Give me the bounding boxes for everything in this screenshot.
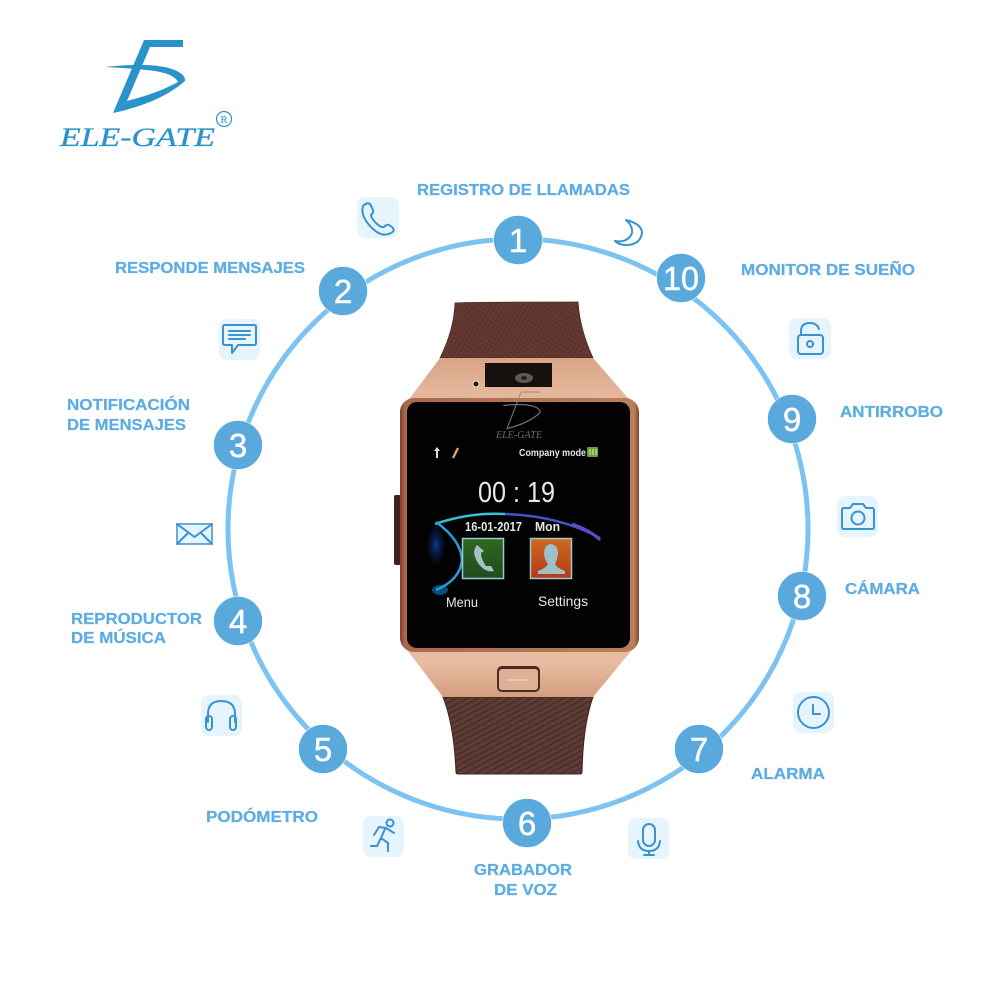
label: alarma: ALARMA xyxy=(751,766,825,783)
upper strap xyxy=(440,302,593,358)
node 6: 6 xyxy=(518,805,536,842)
node 7: 7 xyxy=(690,731,708,768)
icon: message bubble xyxy=(219,319,260,360)
side button xyxy=(394,495,401,565)
node 10: 10 xyxy=(663,260,699,297)
phone app icon xyxy=(462,538,504,578)
icon: camera xyxy=(837,496,878,537)
icon: microphone xyxy=(628,818,669,859)
node 1 xyxy=(494,216,542,264)
smartwatch xyxy=(394,302,639,774)
node 8: 8 xyxy=(793,578,811,615)
node 7 xyxy=(674,724,724,774)
logo: ELE-GATE: R xyxy=(220,114,228,126)
node 1: 1 xyxy=(509,222,527,259)
screen logo: ELE-GATE xyxy=(495,430,542,441)
label: cámara: CÁMARA xyxy=(845,579,920,598)
icon: runner xyxy=(363,816,404,857)
contacts app icon xyxy=(530,538,572,578)
node 4: 4 xyxy=(229,603,247,640)
screen menu label: Menu xyxy=(446,594,478,610)
status bar xyxy=(434,447,598,459)
status bar: Company mode xyxy=(519,448,586,459)
date: 16-01-2017 xyxy=(465,520,522,534)
lower strap xyxy=(443,697,593,774)
node 2 xyxy=(318,266,368,316)
logo: ELE-GATE: ELE-GATE xyxy=(59,123,215,152)
node 5: 5 xyxy=(314,731,332,768)
icon: envelope xyxy=(177,524,212,544)
icon: moon xyxy=(615,220,642,245)
node 4 xyxy=(214,596,262,646)
wallpaper arcs xyxy=(426,514,600,595)
icon: clock xyxy=(793,692,834,733)
icon: phone xyxy=(357,197,399,238)
label: registro de llamadas: REGISTRO DE LLAMADAS xyxy=(417,182,630,199)
node 2: 2 xyxy=(334,273,352,310)
node 9 xyxy=(768,394,816,444)
home button xyxy=(497,666,540,692)
node 8 xyxy=(778,572,826,620)
screen settings label: Settings xyxy=(538,593,588,609)
label: reproductor de música: DE MÚSICA xyxy=(71,628,166,647)
clock time: 00 : 19 xyxy=(478,477,555,509)
label: responde mensajes: RESPONDE MENSAJES xyxy=(115,260,305,277)
feature ring xyxy=(228,239,808,819)
screen bezel xyxy=(400,398,639,652)
screen xyxy=(407,402,630,648)
node 6 xyxy=(502,798,552,848)
watch body xyxy=(400,358,639,697)
label: notificación de mensajes: NOTIFICACIÓN xyxy=(67,395,190,414)
logo: ELE-GATE xyxy=(59,40,232,152)
icon: open padlock xyxy=(789,318,831,359)
label: monitor de sueño: MONITOR DE SUEÑO xyxy=(741,259,915,279)
label: reproductor de música: REPRODUCTOR xyxy=(71,611,202,628)
node 5 xyxy=(298,724,348,774)
node 10 xyxy=(656,254,706,302)
camera module xyxy=(473,363,552,387)
label: grabador de voz xyxy=(474,862,572,899)
node 3: 3 xyxy=(229,427,247,464)
screen logo xyxy=(495,392,542,441)
weekday: Mon xyxy=(535,520,560,534)
icon: headphones xyxy=(201,695,242,736)
label: grabador de voz: GRABADOR xyxy=(474,862,572,879)
node 3 xyxy=(214,420,262,470)
node 9: 9 xyxy=(783,401,801,438)
label: grabador de voz: DE VOZ xyxy=(494,882,557,899)
label: podómetro: PODÓMETRO xyxy=(206,807,318,826)
label: reproductor de música xyxy=(71,611,202,647)
label: notificación de mensajes: DE MENSAJES xyxy=(67,417,186,434)
label: antirrobo: ANTIRROBO xyxy=(840,404,943,421)
label: notificación de mensajes xyxy=(67,395,190,434)
